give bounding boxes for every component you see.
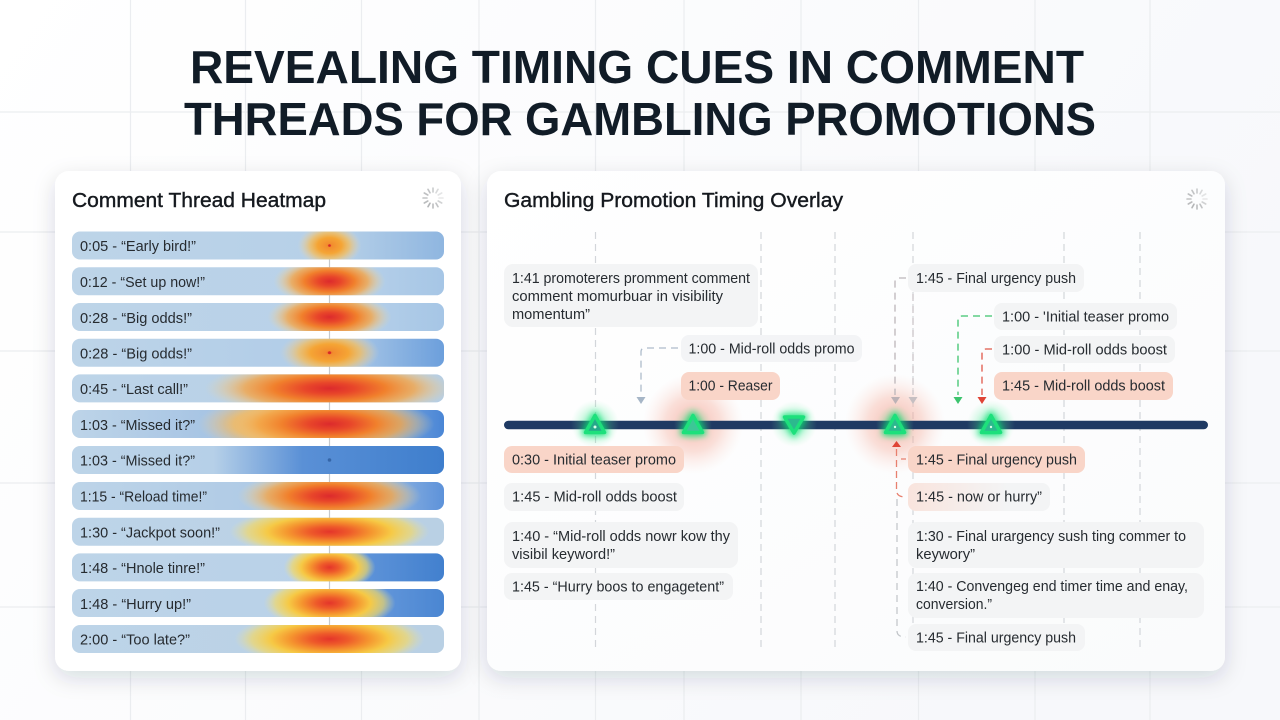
connector: gray lower [897,499,906,637]
heat row 1:48 [72,553,444,582]
heat row 2:00: 2:00 - “Too late?” [80,632,190,648]
callout: initial teaser promo [994,303,1177,330]
title: THREADS FOR GAMBLING PROMOTIONS [184,93,1096,145]
title: REVEALING TIMING CUES IN COMMENT [190,41,1084,93]
callout: initial teaser [504,446,684,473]
green glow: markers [571,400,1015,448]
red glow at 1:45 marker [845,374,945,474]
callout: final urargency: 1:30 - Final urargency sush ting commer to [916,529,1186,545]
callout: final urgency push top [908,264,1084,292]
marker: 1:00 up triangle [684,416,702,432]
icon: spinner [1187,189,1207,209]
marker: 1:45 up triangle [886,416,904,432]
callout: final urgency peach: 1:45 - Final urgency push [916,452,1077,468]
callout: now or hurry: 1:45 - now or hurry” [916,490,1042,506]
panel: gambling promotion timing overlay [487,171,1225,671]
callout: initial teaser: 0:30 - Initial teaser promo [512,452,676,468]
panel: comment thread heatmap [55,171,461,671]
heat row 0:28: 0:28 - “Big odds!” [80,310,192,327]
heat row 1:48 hurry [72,589,444,617]
heat row 1:30 [72,518,444,546]
callout: reaser [681,372,780,400]
icon: spinner [423,188,443,208]
callout: keyword: visibil keyword!” [512,547,615,563]
heat row 0:28 [72,303,444,331]
connector arrow: dashed guide [908,294,918,404]
callout: keyword [504,522,738,568]
callout: convengeg: 1:40 - Convengeg end timer time and enay, [916,579,1188,595]
callout: initial teaser promo: 1:00 - 'Initial teaser promo [1002,310,1169,326]
connector arrow: mid-roll promo [636,348,678,404]
callout: reaser: 1:00 - Reaser [688,378,773,394]
heat row 0:05: 0:05 - “Early bird!” [80,238,196,255]
callout: final urargency: keywory” [916,547,975,563]
callout: final urgency peach [908,446,1085,473]
heading: comment thread heatmap: Comment Thread Heatmap [72,189,326,212]
heat row 0:12 [72,267,444,296]
heat row 0:45: 0:45 - “Last call!” [80,381,188,398]
heat row 0:28 second [72,338,444,367]
callout: final urgency bottom [908,624,1085,651]
heat row 2:00 [72,625,444,653]
callout: mid-roll odds boost [994,336,1175,363]
callout: mid-roll odds promo [681,335,862,362]
connector arrow: final urgency [891,278,906,404]
timeline bar [504,421,1208,429]
heat row 1:48 hurry: 1:48 - “Hurry up!” [80,596,191,613]
callout: final urgency bottom: 1:45 - Final urgency push [916,630,1076,646]
callout: keyword: 1:40 - “Mid-roll odds nowr kow thy [512,529,731,545]
callout: convengeg [908,573,1204,618]
connector arrow: red [978,349,992,404]
callout: now or hurry [908,483,1050,511]
connector arrow: red upward [892,441,906,497]
marker: 0:30 up triangle [586,416,604,432]
heat row 1:03 cold: 1:03 - “Missed it?” [80,452,195,470]
heading: timing overlay: Gambling Promotion Timing Overlay [504,189,844,212]
callout: mid-roll odds boost: 1:00 - Mid-roll odds boost [1002,342,1167,358]
marker: late up triangle [982,416,1000,432]
callout: promoters: momentum” [512,307,590,323]
connector arrow: green [954,316,992,404]
callout: promoters [504,264,758,327]
heat row 1:03 [72,410,444,438]
heat row 0:28 second: 0:28 - “Big odds!” [80,346,192,362]
heat row 0:45 [72,374,444,402]
callout: convengeg: conversion.” [916,597,992,613]
title [184,41,1096,145]
callout: hurry boos [504,573,733,600]
callout: mid-roll boost lower: 1:45 - Mid-roll odds boost [512,490,677,506]
callout: mid-roll boost lower [504,483,684,511]
heat row 0:12: 0:12 - “Set up now!” [80,274,205,291]
callout: promoters: 1:41 promoterers promment comment [512,271,750,287]
heat row 1:15: 1:15 - “Reload time!” [80,488,207,506]
marker: down triangle [784,417,804,433]
callout: final urgency push top: 1:45 - Final urgency push [916,271,1076,287]
heat row 1:03: 1:03 - “Missed it?” [80,417,195,434]
heat row 1:15 [72,482,444,510]
callout: hurry boos: 1:45 - “Hurry boos to engagetent” [512,580,724,596]
callout: mid-roll odds promo: 1:00 - Mid-roll odds promo [688,342,854,358]
callout: final urargency [908,522,1204,568]
heat row 0:05 [72,232,444,260]
heat row 1:30: 1:30 - “Jackpot soon!” [80,524,220,542]
heat row 1:03 cold [72,446,444,474]
red glow at 1:00 marker [643,374,743,474]
callout: promoters: comment momurbuar in visibility [512,289,724,305]
callout: mid-roll odds boost peach [994,372,1173,400]
heat row 1:48: 1:48 - “Hnole tinre!” [80,560,205,577]
callout: mid-roll odds boost peach: 1:45 - Mid-roll odds boost [1002,378,1165,394]
